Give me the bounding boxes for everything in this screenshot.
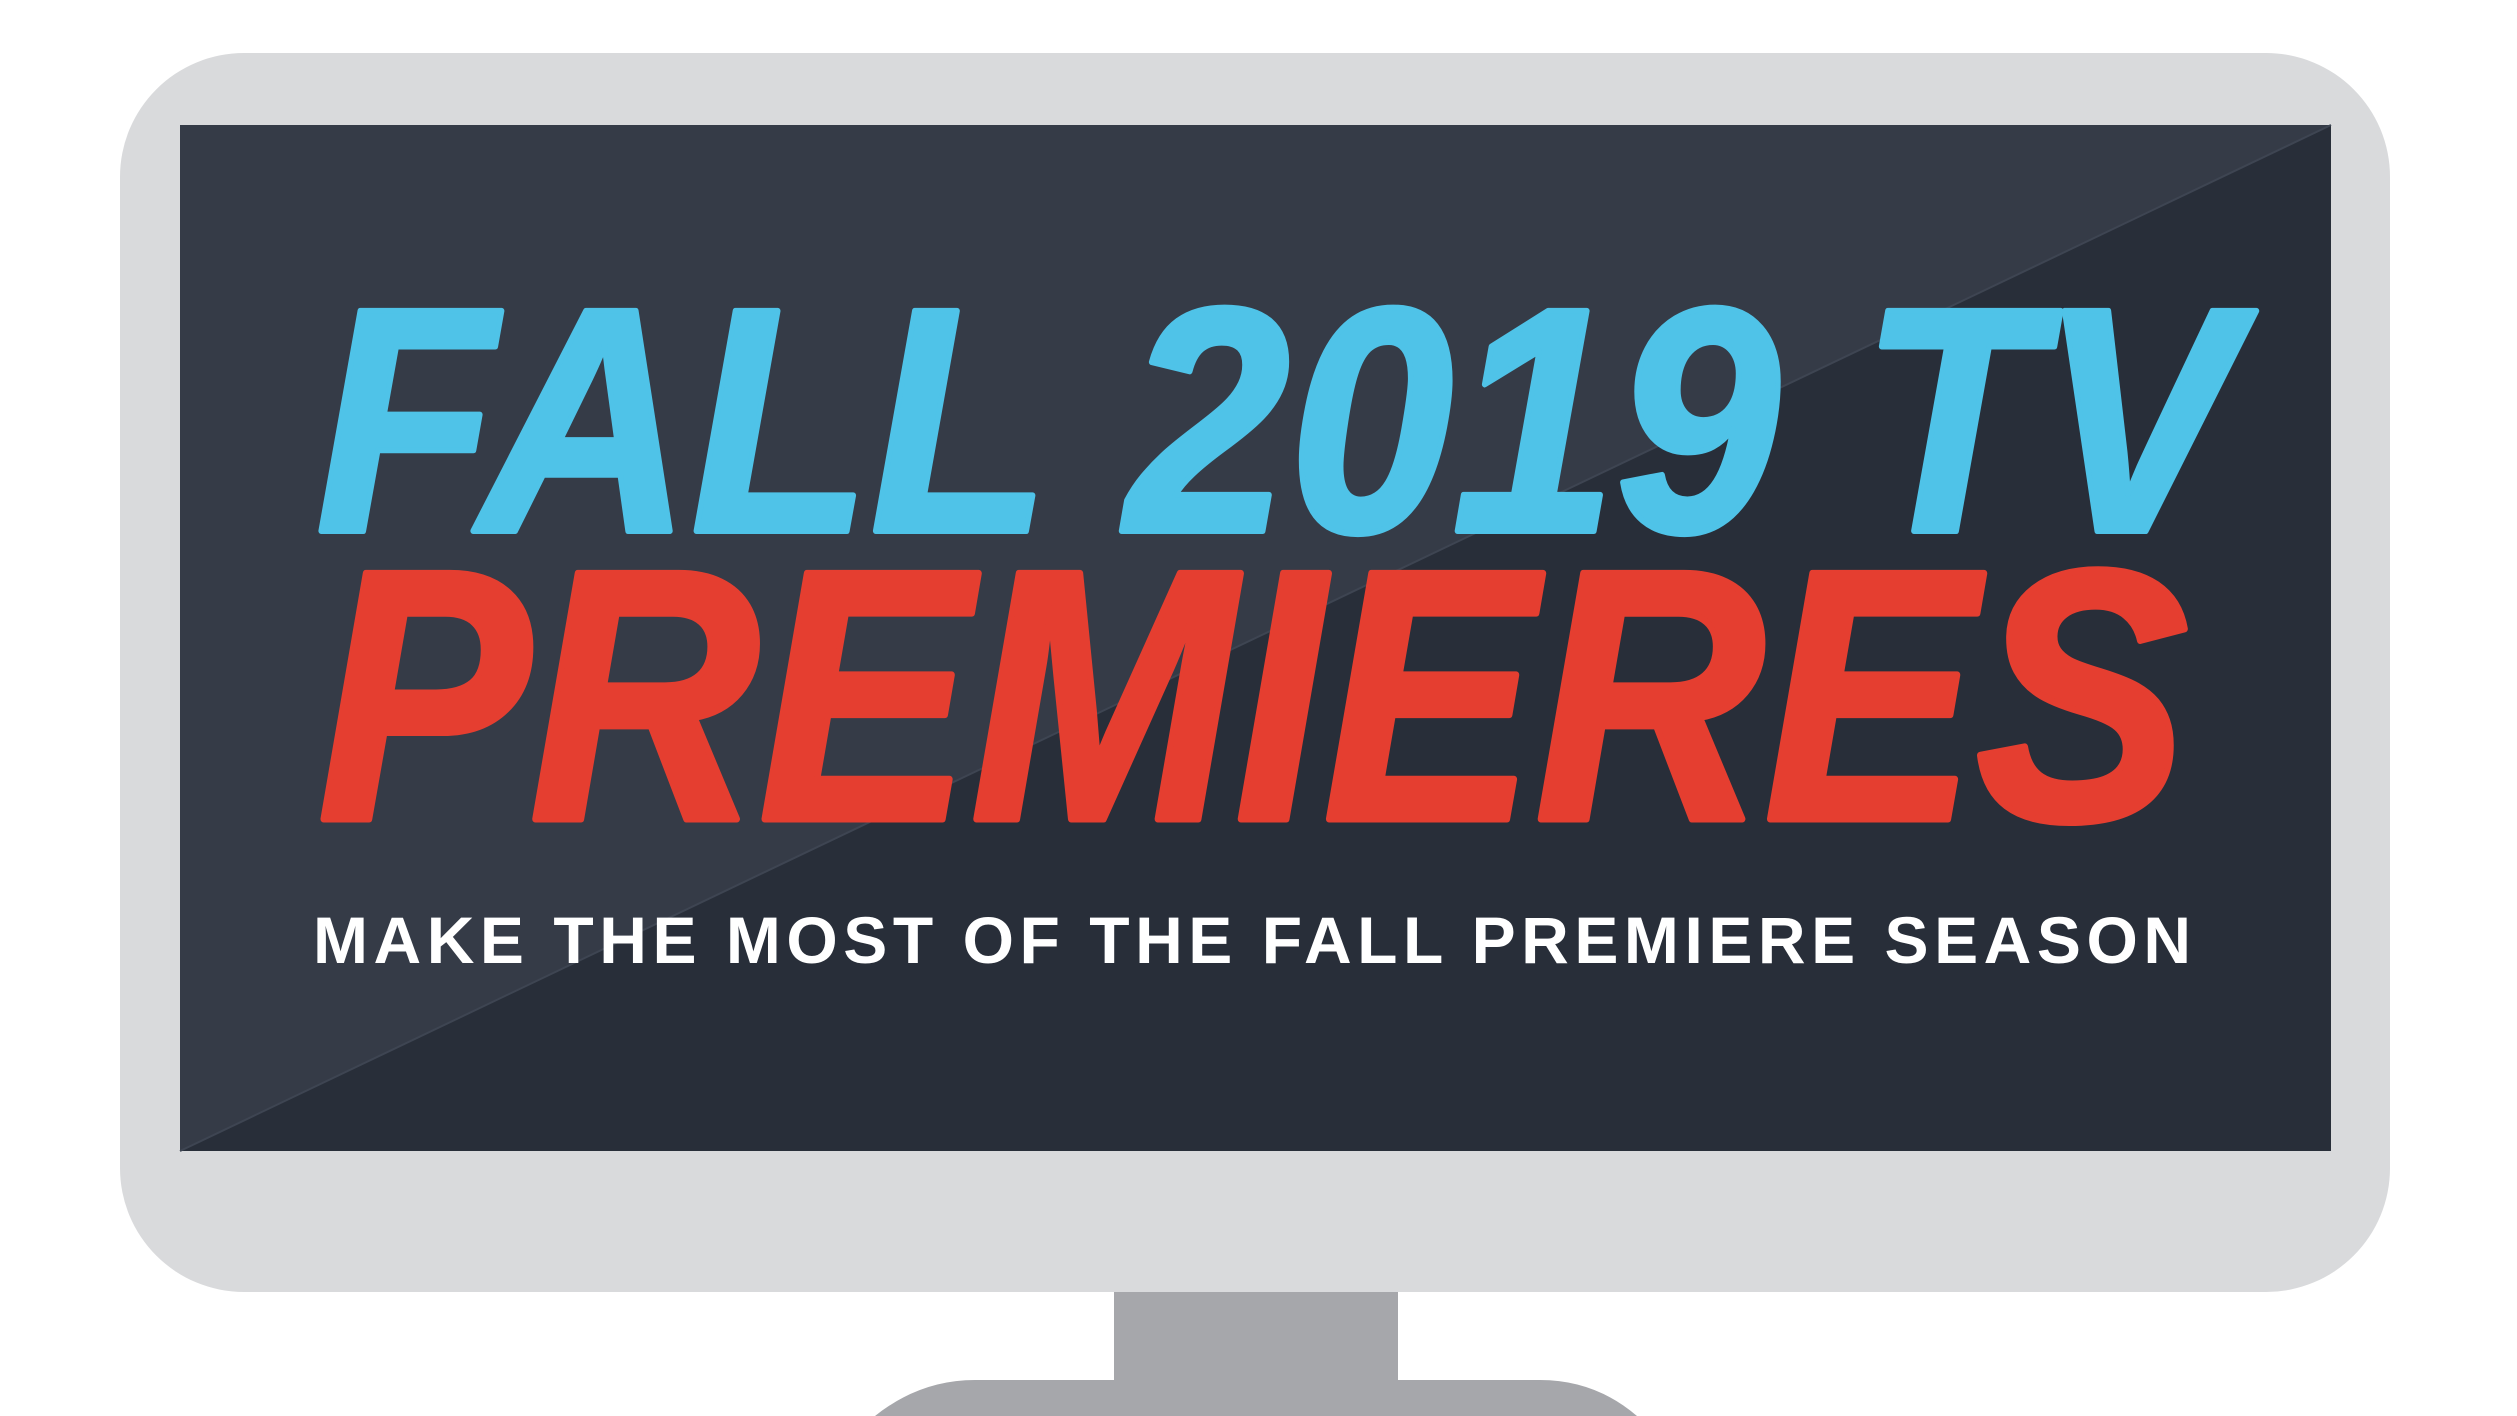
title: FALL 2019 TV: FALL 2019 TV [316,241,2260,599]
monitor bezel [120,53,2390,1292]
subtitle: MAKE THE MOST OF THE FALL PREMIERE SEASON [313,903,2191,977]
title: PREMIERES: PREMIERES [318,496,2190,895]
stand neck [1114,1140,1398,1382]
screen [180,125,2331,1151]
stand base [875,1380,1637,1416]
